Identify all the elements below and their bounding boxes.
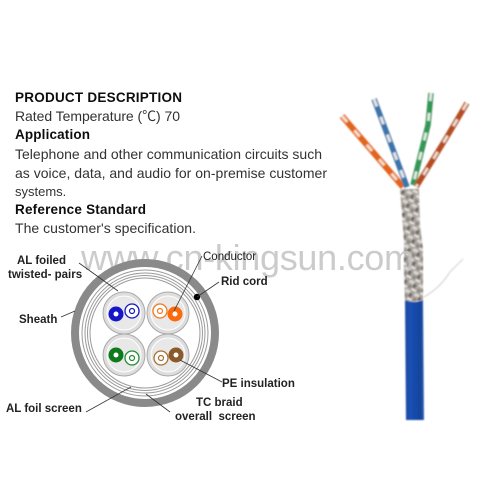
green pair bbox=[413, 93, 431, 185]
application text: as voice, data, and audio for on-premise customer bbox=[15, 165, 327, 181]
text block: product description bbox=[15, 90, 327, 236]
brown pair bbox=[416, 103, 467, 187]
cable cross-section diagram bbox=[6, 251, 295, 423]
label: AL foil screen: AL foil screen bbox=[6, 403, 82, 415]
application text: systems. bbox=[15, 184, 66, 199]
orange pair bbox=[342, 116, 403, 187]
label: rip cord: Rid cord bbox=[221, 276, 268, 288]
pair: orange bbox=[147, 292, 189, 334]
leader lines bbox=[61, 256, 222, 412]
sheath bbox=[75, 263, 215, 403]
label: sheath: Sheath bbox=[19, 314, 57, 326]
screen rings bbox=[82, 270, 208, 396]
braid shield bbox=[400, 189, 423, 303]
heading: product description: PRODUCT DESCRIPTION bbox=[15, 90, 182, 105]
label: conductor: Conductor bbox=[203, 251, 256, 263]
application text bbox=[15, 146, 327, 199]
reference standard text: The customer's specification. bbox=[15, 220, 196, 236]
cable photo bbox=[342, 93, 467, 420]
pair: green bbox=[103, 334, 145, 376]
pair: blue bbox=[103, 292, 145, 334]
drain wire bbox=[424, 259, 463, 297]
label: PE insulation: PE insulation bbox=[222, 378, 295, 390]
application text: Telephone and other communication circuits such bbox=[15, 146, 322, 162]
heading: application: Application bbox=[15, 127, 90, 142]
label: TC braid overall screen: TC braid bbox=[196, 397, 243, 409]
blue pair bbox=[374, 99, 407, 187]
pair: brown bbox=[147, 334, 189, 376]
label: TC braid overall screen: overall screen bbox=[175, 411, 256, 423]
watermark: www.cn-kingsun.com bbox=[80, 237, 414, 278]
rated temperature: Rated Temperature (℃) 70 bbox=[15, 108, 180, 124]
label: AL foiled twisted-pairs: twisted- pairs bbox=[8, 269, 82, 281]
heading: reference standard: Reference Standard bbox=[15, 202, 146, 217]
label: TC braid overall screen bbox=[175, 397, 256, 423]
label: AL foiled twisted-pairs: AL foiled bbox=[17, 255, 66, 267]
blue jacket bbox=[405, 300, 424, 420]
rip cord dot bbox=[194, 294, 200, 300]
label: AL foiled twisted-pairs bbox=[8, 255, 82, 281]
